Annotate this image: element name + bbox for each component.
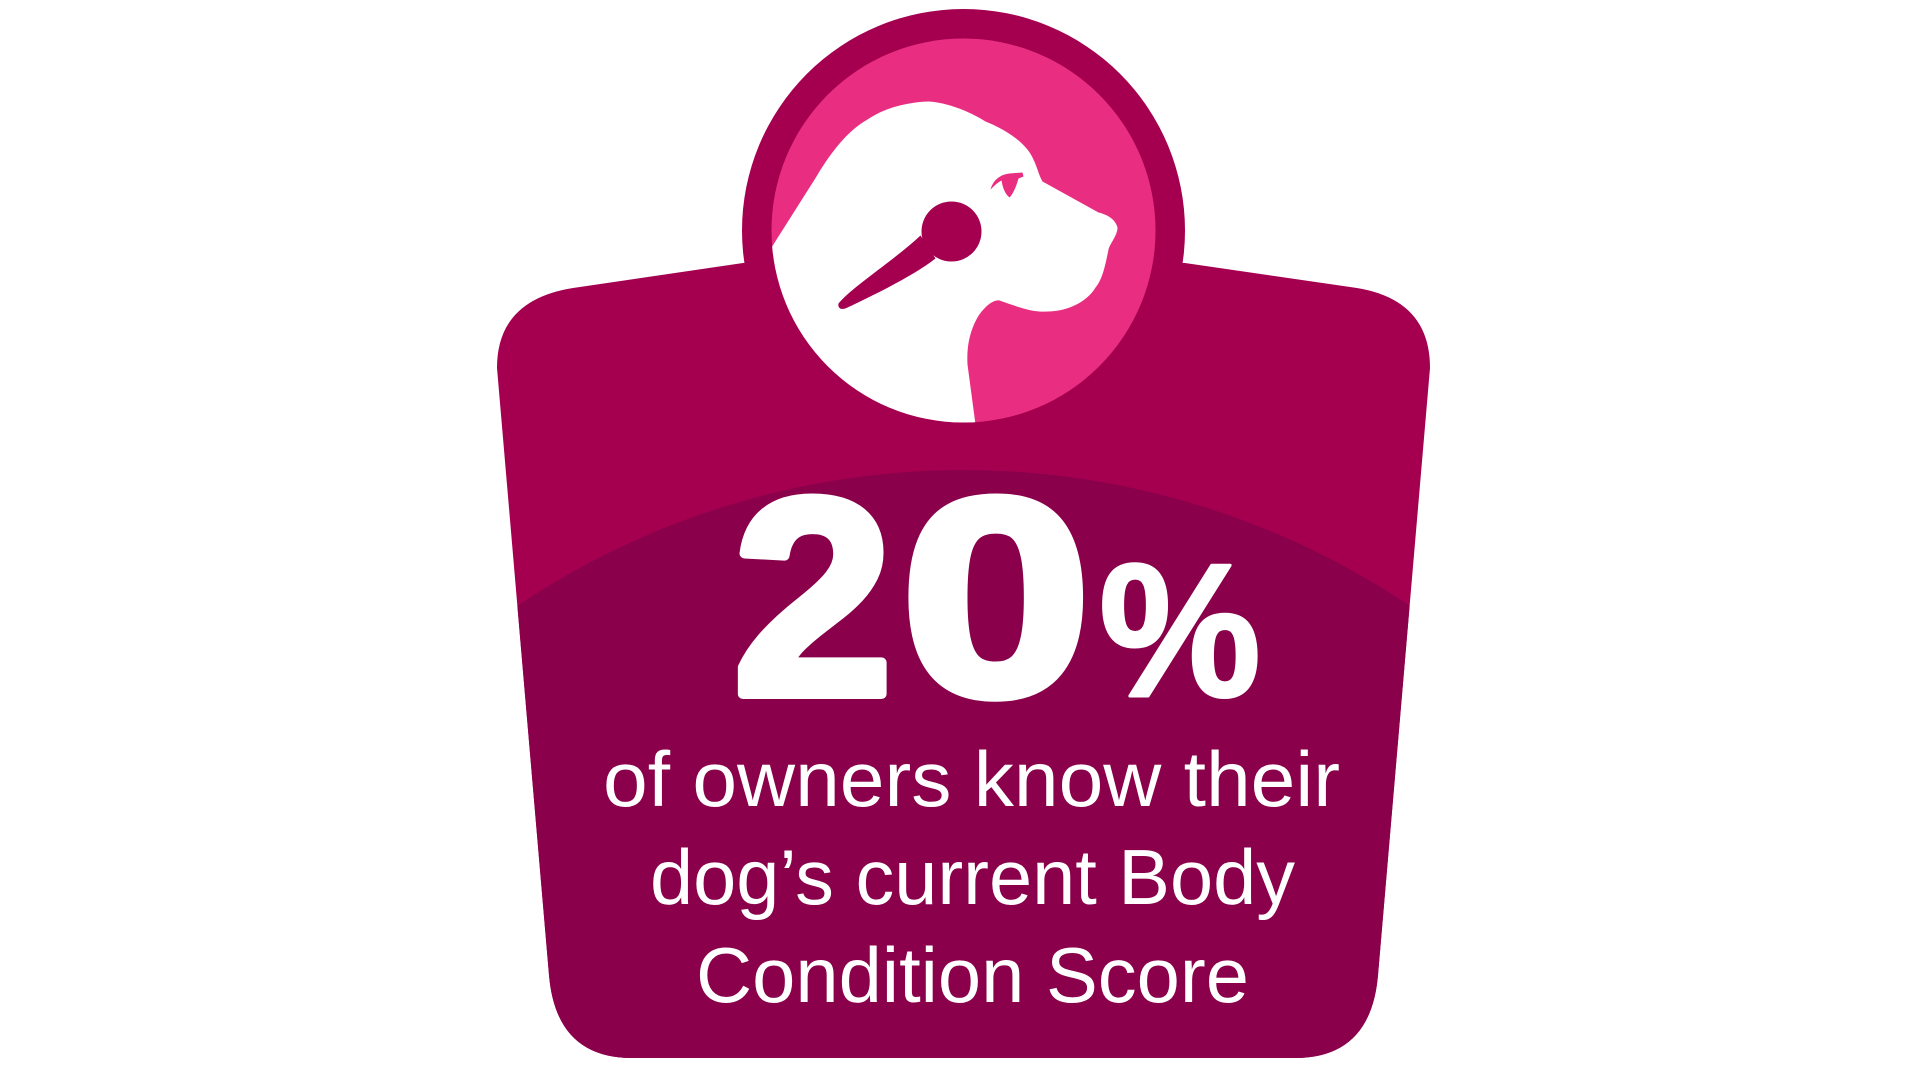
icon: dog head silhouette [772, 102, 1118, 422]
statistic: 20 percent [733, 442, 1261, 754]
infographic: dog weighing scale [497, 9, 1430, 1058]
description text [603, 735, 1340, 1019]
scale body [497, 263, 1430, 1058]
statistic: 20 percent: % [1099, 525, 1261, 737]
statistic: 20 percent: 0 [901, 442, 1091, 754]
description text: Condition Score [696, 931, 1249, 1019]
description text: of owners know their [603, 735, 1340, 823]
scale dial [742, 9, 1185, 422]
statistic: 20 percent: 2 [733, 442, 893, 754]
scale dial pink face [772, 38, 1156, 422]
scale dial outer ring [742, 9, 1185, 452]
dark lower panel [500, 470, 1427, 1058]
description text: dog’s current Body [650, 833, 1295, 921]
icon: dial needle [838, 202, 982, 309]
icon: dog eye [990, 172, 1024, 198]
